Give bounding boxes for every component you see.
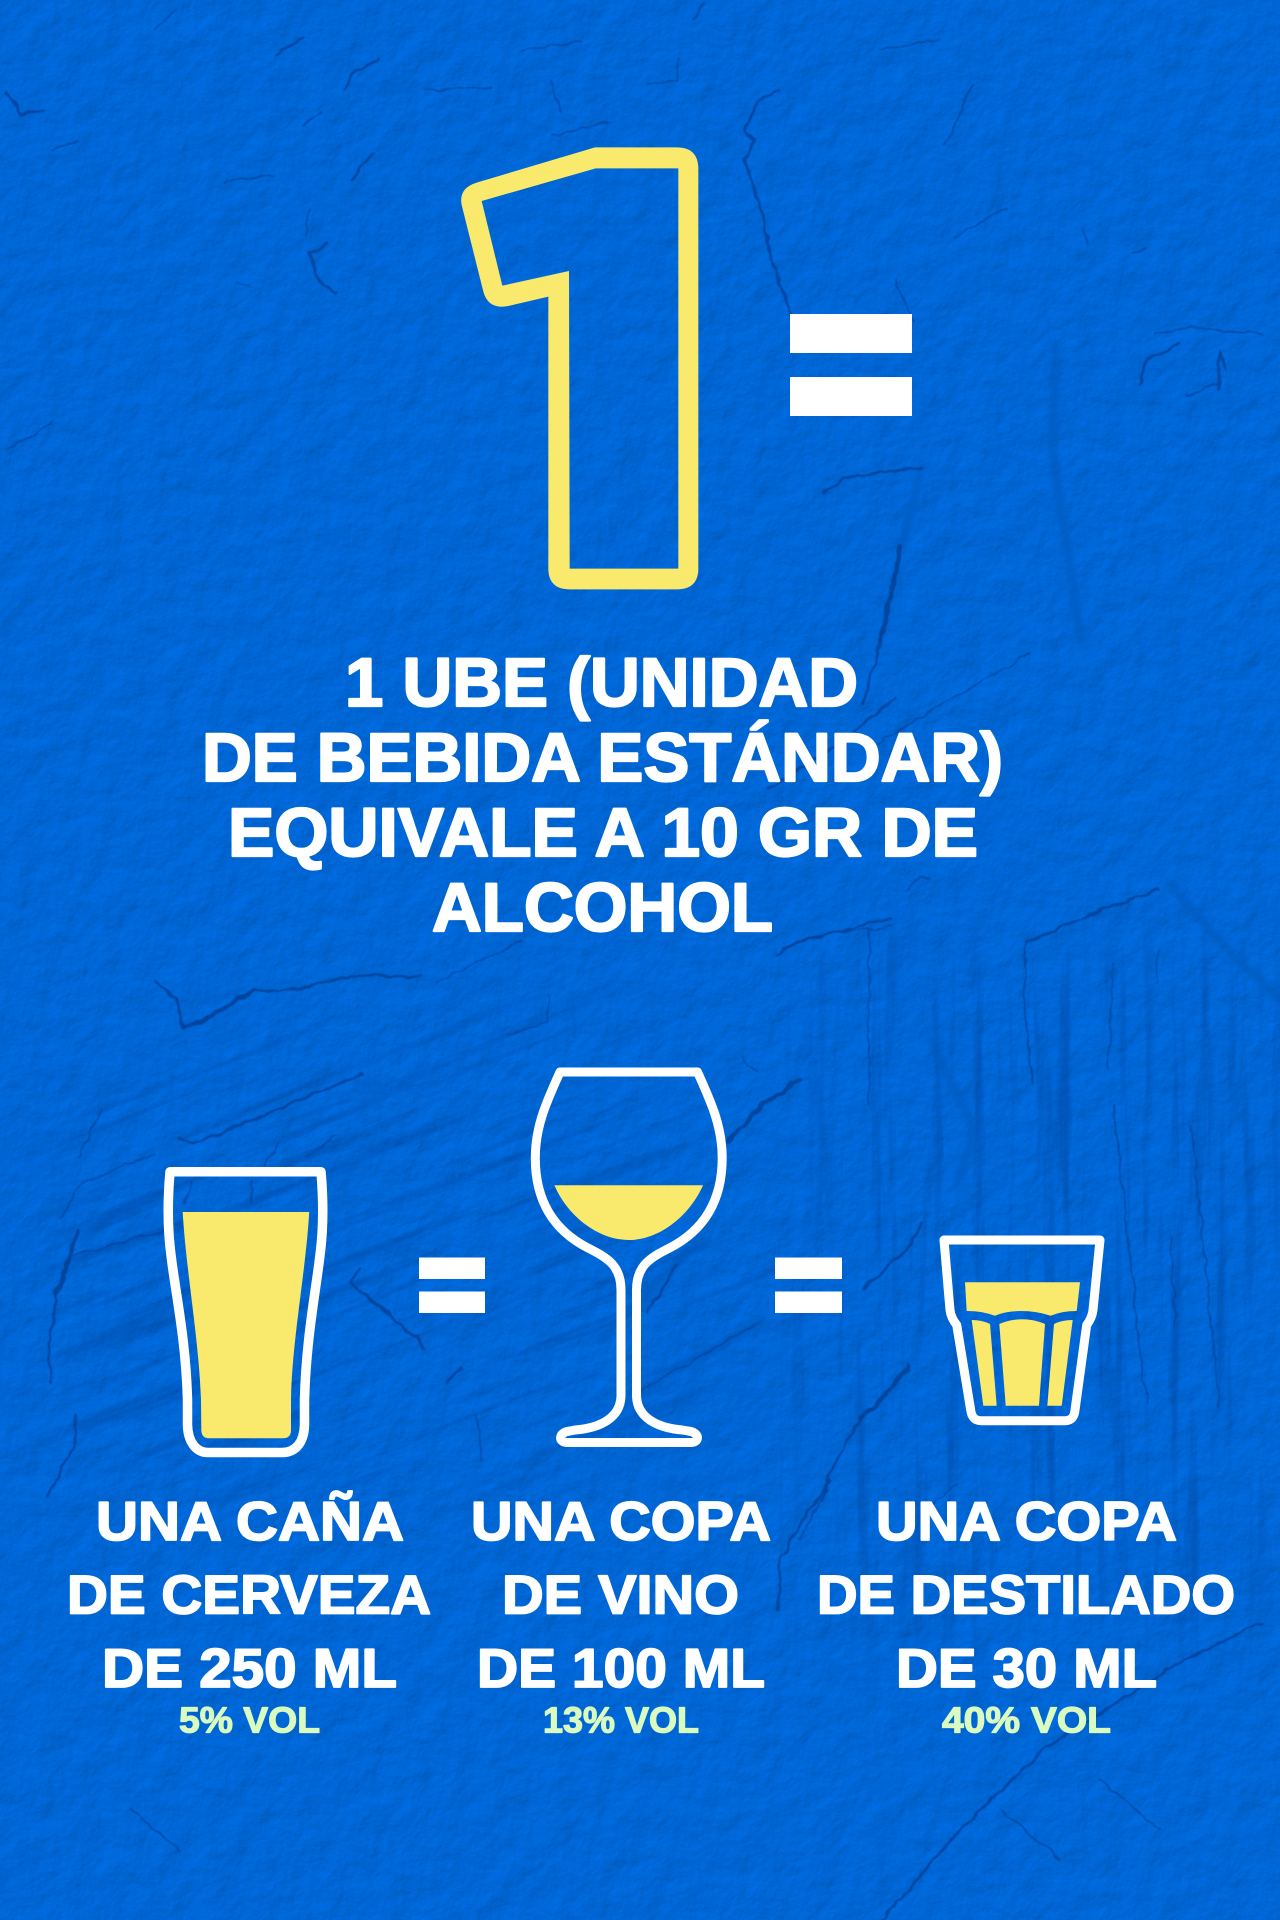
label: wine xyxy=(471,1490,771,1740)
title: UBE definition: ALCOHOL xyxy=(432,869,773,946)
spirit strength: 40% VOL xyxy=(942,1700,1111,1740)
beer strength: 5% VOL xyxy=(179,1700,320,1740)
title: UBE definition: DE BEBIDA ESTÁNDAR) xyxy=(202,719,1003,796)
wine strength: 13% VOL xyxy=(543,1700,699,1740)
label: wine: DE 100 ML xyxy=(477,1637,765,1699)
label: beer: UNA CAÑA xyxy=(96,1490,404,1552)
label: beer: DE 250 ML xyxy=(102,1637,397,1699)
title: UBE definition: EQUIVALE A 10 GR DE xyxy=(228,794,978,871)
label: spirit: UNA COPA xyxy=(876,1490,1177,1552)
label: beer: DE CERVEZA xyxy=(67,1564,431,1626)
icon: wine glass xyxy=(535,1072,722,1442)
title: UBE definition: 1 UBE (UNIDAD xyxy=(345,644,858,721)
label: spirit: DE 30 ML xyxy=(896,1637,1157,1699)
equals sign between beer and wine xyxy=(419,1258,485,1313)
label: spirit xyxy=(817,1490,1235,1740)
icon: spirit glass xyxy=(944,1240,1100,1421)
large equals sign xyxy=(790,314,912,416)
label: wine: DE VINO xyxy=(502,1564,739,1626)
label: wine: UNA COPA xyxy=(471,1490,771,1552)
label: spirit: DE DESTILADO xyxy=(817,1564,1235,1626)
label: beer xyxy=(67,1490,431,1740)
icon: beer glass xyxy=(168,1172,323,1452)
equals sign between wine and spirit xyxy=(775,1258,842,1313)
big outlined number 1 xyxy=(461,147,698,589)
title: UBE definition xyxy=(202,644,1003,946)
